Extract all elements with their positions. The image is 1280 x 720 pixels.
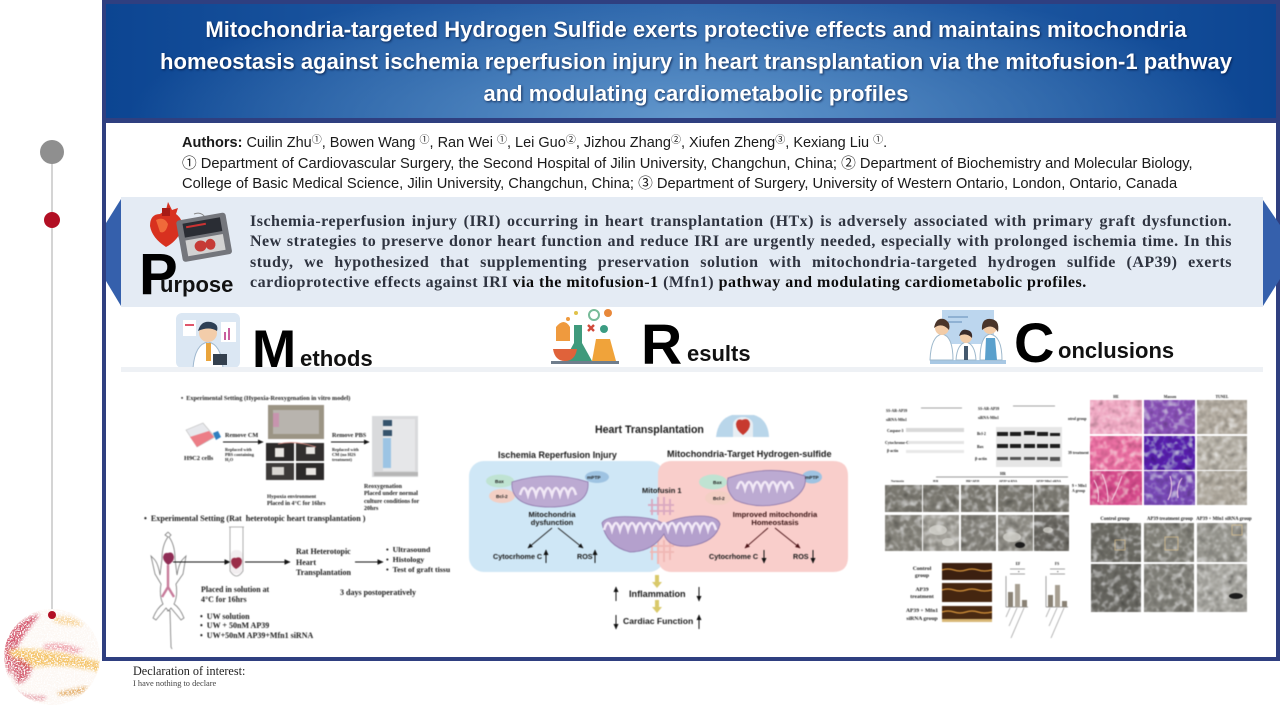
- timeline decoration: [4, 140, 100, 705]
- label: reoxygenation: [364, 484, 420, 512]
- label: ROS up: [577, 550, 595, 563]
- authors and affiliations: ① Department of Cardiovascular Surgery, the Second Hospital of Jilin University, Changchun, China; ② Department of Biochemistry and Molecular Biology,: [182, 156, 1193, 172]
- heading: mitochondria-target hydrogen-sulfide: Mitochondria-Target Hydrogen-sulfide: [667, 449, 832, 459]
- label: hypoxia environment: Hypoxia environment: [267, 494, 316, 500]
- bar chart: EF: [1006, 562, 1028, 638]
- label: reoxygenation: 20hrs: [364, 506, 379, 512]
- western blot: caspase and cytochrome: Cytochrome-C: [885, 441, 909, 445]
- icon: cell culture flask: [186, 423, 221, 447]
- western blot: Bcl-2 and Bax: siRNA-Mfn1: [978, 416, 999, 420]
- label: placed in 4 degrees: Placed in 4°C for 16hrs: [267, 500, 326, 507]
- western blot: caspase and cytochrome: SS-AR-AP39: [886, 409, 907, 413]
- echocardiography strips: [906, 563, 992, 622]
- label: ROS up: ROS: [577, 552, 593, 561]
- arrow: to cardiac function: [652, 600, 662, 613]
- icon: test tube with heart: [229, 527, 244, 576]
- list: outcome tests: [386, 545, 451, 574]
- label: improved mitochondria homeostasis: Homeostasis: [751, 518, 799, 527]
- heading: Purpose: [139, 242, 233, 307]
- section header: Results: [551, 309, 751, 377]
- echocardiography strips: siRNA group: [906, 616, 938, 622]
- histology grid: 9 + Mfn1: [1072, 484, 1087, 488]
- left chevron: [106, 199, 121, 306]
- divider strip: [121, 367, 1263, 372]
- purpose text: [250, 213, 1232, 291]
- heading: Results: esults: [687, 341, 751, 366]
- histology grid: TUNEL: [1215, 395, 1229, 399]
- arrow: to inflammation: [652, 575, 662, 588]
- arrow: remove CM: Replaced with: [225, 447, 252, 452]
- bar chart: EF: *: [1018, 570, 1020, 574]
- electron micrographs: treatment columns: HR: [1000, 472, 1006, 476]
- label: placed in solution: 4°C for 16hrs: [201, 595, 247, 604]
- list: outcome tests: • Test of graft tissu: [386, 565, 451, 574]
- purpose text: New strategies to preserve donor heart function and reduce IRI are urgently needed, especially with prolonged ischemia time. In this: [250, 233, 1232, 250]
- title: homeostasis against ischemia reperfusion injury in heart transplantation via the mitofusion-1 pathway: [160, 49, 1232, 74]
- label: cardiac function: [616, 615, 699, 629]
- histology grid: ntrol group: [1068, 417, 1087, 421]
- arrow: remove PBS: [331, 432, 369, 462]
- list: solution groups: • UW solution: [200, 612, 250, 621]
- list: solution groups: • UW+50nM AP39+Mfn1 siRNA: [200, 631, 313, 640]
- label: rat heterotopic heart transplantation: Heart: [296, 558, 316, 567]
- electron micrographs: control, AP39, siRNA: AP39 treatment group: [1147, 517, 1193, 522]
- western blot: caspase and cytochrome: siRNA-Mfn1: [886, 418, 907, 422]
- heading: heart transplantation: Heart Transplantation: [595, 424, 704, 436]
- declaration text: I have nothing to declare: [133, 679, 216, 688]
- arrow: remove CM: Remove CM: [225, 432, 258, 439]
- arrow: remove PBS: treatment): [332, 457, 352, 462]
- icon: scientists with microscope: [930, 310, 1006, 364]
- section header: Conclusions: [930, 310, 1174, 374]
- electron micrographs: treatment columns: HR+AP39: [966, 479, 980, 483]
- western blot: caspase and cytochrome: Caspase-3: [887, 429, 904, 433]
- label: reoxygenation: culture conditions for: [364, 499, 420, 505]
- title banner: [106, 4, 1276, 123]
- illustration: damaged mitochondrion: mPTP: [587, 475, 601, 481]
- histology grid: 39 treatment: [1068, 451, 1089, 455]
- icon: lab flasks: [551, 309, 619, 364]
- icon: rat heart and vessels: [162, 552, 174, 597]
- electron micrographs: treatment columns: H/R: [933, 479, 939, 483]
- western blot: Bcl-2 and Bax: [975, 406, 1062, 467]
- illustration: healthy mitochondrion: mPTP: [805, 475, 819, 481]
- icon: heart and preservation machine: [150, 202, 232, 262]
- electron micrographs: control, AP39, siRNA: [1091, 517, 1252, 612]
- list: outcome tests: • Histology: [386, 555, 424, 564]
- bar chart: FS: [1046, 562, 1068, 638]
- label: mitochondria dysfunction: dysfunction: [531, 518, 574, 527]
- panel: ischemia reperfusion injury: [469, 461, 664, 572]
- electron micrographs: control, AP39, siRNA: Control group: [1100, 517, 1130, 522]
- illustration: rat: [151, 532, 186, 649]
- bar chart: FS: FS: [1055, 562, 1059, 566]
- heading: Purpose: urpose: [160, 272, 233, 297]
- authors and affiliations: [182, 134, 1193, 192]
- heading: Conclusions: onclusions: [1058, 338, 1174, 363]
- section header: Methods: [176, 313, 373, 370]
- label: mitofusin 1: Mitofusin 1: [642, 486, 682, 495]
- conclusions figure: [885, 395, 1252, 638]
- western blot: Bcl-2 and Bax: SS-AR-AP39: [978, 407, 999, 411]
- label: placed in solution: Placed in solution at: [201, 585, 270, 594]
- purpose panel: [106, 197, 1280, 307]
- western blot: caspase and cytochrome: [885, 408, 964, 453]
- label: reoxygenation: Reoxygenation: [364, 484, 403, 490]
- western blot: Bcl-2 and Bax: β-actin: [975, 456, 988, 461]
- illustration: healthy mitochondrion: Bax: [713, 480, 722, 486]
- heading: Conclusions: [1014, 311, 1174, 374]
- label: ROS down: [793, 550, 813, 563]
- label: mitochondria dysfunction: Mitochondria: [528, 510, 576, 519]
- list: outcome tests: • Ultrasound: [386, 545, 431, 554]
- label: inflammation: [616, 587, 699, 601]
- photo: hypoxia chambers: [266, 442, 324, 480]
- label: 3 days postoperatively: 3 days postoperatively: [340, 588, 416, 597]
- declaration of interest: [133, 664, 245, 688]
- arrows: dysfunction outcomes: [528, 528, 583, 548]
- authors and affiliations: College of Basic Medical Science, Jilin University, Changchun, China; ③ Department of Surgery, University of Western Ontario, London, Ontario, Canada: [182, 176, 1177, 192]
- illustration: healthy mitochondrion: Bcl-2: [713, 496, 725, 502]
- label: rat heterotopic heart transplantation: Rat Heterotopic: [296, 547, 351, 556]
- arrow: remove CM: [223, 432, 263, 462]
- illustration: fused mitochondria: [602, 497, 720, 564]
- icon: incubator: [372, 416, 418, 477]
- arrows: homeostasis outcomes: [745, 528, 800, 548]
- histology grid: A group: [1072, 489, 1085, 493]
- purpose text: cardioprotective effects against IRI via the mitofusion-1 (Mfn1) pathway and modulating cardiometabolic profiles.: [250, 274, 1087, 291]
- label: cytochrome C up: [493, 550, 546, 563]
- western blot: Bcl-2 and Bax: Bcl-2: [977, 431, 986, 436]
- bar chart: FS: *: [1057, 570, 1059, 574]
- electron micrographs: treatment columns: Normoxia: [891, 479, 904, 483]
- label: H9C2 cells: H9C2 cells: [184, 455, 214, 462]
- title: Mitochondria-targeted Hydrogen Sulfide exerts protective effects and maintains mitochondria: [205, 17, 1187, 42]
- heading: rat transplantation setting: • Experimental Setting (Rat heterotopic heart transplantation ): [144, 514, 366, 523]
- authors and affiliations: Authors: Cuilin Zhu①, Bowen Wang ①, Ran Wei ①, Lei Guo②, Jizhou Zhang②, Xiufen Zheng③, Kexiang Liu ①.: [182, 135, 887, 151]
- arrow: to outcome tests: [355, 561, 383, 563]
- panel background: [121, 197, 1263, 307]
- arrow: remove CM: PBS containing: [225, 452, 255, 457]
- echocardiography strips: treatment: [910, 594, 934, 600]
- label: cytochrome C down: Cytocrhome C: [709, 552, 758, 561]
- purpose text: study, we hypothesized that supplementing preservation solution with mitochondria-targeted hydrogen sulfide (AP39) exerts: [250, 254, 1232, 271]
- arrow: remove CM: H₂O: [225, 457, 234, 462]
- label: reoxygenation: Placed under normal: [364, 491, 418, 497]
- bar chart: EF: EF: [1016, 562, 1021, 566]
- methods figure: [144, 395, 451, 649]
- illustration: damaged mitochondrion: Bcl-2: [496, 494, 508, 500]
- icon: doctor with charts: [176, 313, 240, 367]
- label: ROS down: ROS: [793, 552, 809, 561]
- arrow: tube to transplantation: [245, 561, 290, 563]
- echocardiography strips: AP39 + Mfn1: [906, 608, 938, 614]
- heading: Conclusions: C: [1014, 311, 1054, 374]
- purpose text: Ischemia-reperfusion injury (IRI) occurring in heart transplantation (HTx) is adversely associated with primary graft dysfunction.: [250, 213, 1232, 230]
- label: inflammation: Inflammation: [629, 589, 686, 599]
- label: cytochrome C down: [709, 550, 764, 563]
- histology grid: Masson: [1164, 395, 1177, 399]
- illustration: damaged mitochondrion: [486, 471, 609, 507]
- heading: hypoxia-reoxygenation setting: • Experimental Setting (Hypoxia-Reoxygenation in vitro model): [181, 395, 350, 402]
- results figure: [469, 415, 848, 629]
- icon: chest with heart: [716, 415, 769, 437]
- illustration: damaged mitochondrion: Bax: [495, 479, 504, 485]
- heading: Results: R: [641, 313, 682, 377]
- label: mitochondria dysfunction: [528, 510, 576, 527]
- electron micrographs: control, AP39, siRNA: AP39 + Mfn1 siRNA group: [1196, 517, 1252, 522]
- photo: hypoxia bag: [268, 405, 324, 439]
- electron micrographs: treatment columns: AP39+Mfn1 siRNA: [1036, 479, 1062, 483]
- label: cytochrome C up: Cytocrhome C: [493, 552, 542, 561]
- western blot: Bcl-2 and Bax: Bax: [977, 444, 984, 449]
- arrow: remove PBS: CM (no H2S: [332, 452, 356, 457]
- label: cardiac function: Cardiac Function: [623, 616, 693, 626]
- panel: hydrogen sulfide: [658, 461, 848, 572]
- title: and modulating cardiometabolic profiles: [483, 81, 909, 106]
- electron micrographs: treatment columns: AP39+si-RNA: [999, 479, 1018, 483]
- histology grid: [1068, 395, 1247, 505]
- heading: Results: [641, 313, 751, 377]
- histology grid: HE: [1113, 395, 1119, 399]
- western blot: caspase and cytochrome: β-actin: [887, 449, 899, 453]
- echocardiography strips: Control: [913, 566, 932, 572]
- electron micrographs: treatment columns: [885, 472, 1069, 551]
- label: rat heterotopic heart transplantation: [296, 547, 352, 577]
- heading: Purpose: P: [139, 242, 178, 307]
- illustration: healthy mitochondrion: [699, 470, 822, 506]
- list: solution groups: [200, 612, 313, 640]
- label: rat heterotopic heart transplantation: Transplantation: [296, 568, 352, 577]
- arrow: rat to tube: [173, 561, 230, 563]
- declaration heading: Declaration of interest:: [133, 664, 245, 678]
- title: [160, 17, 1234, 108]
- label: placed in solution: [201, 585, 270, 604]
- label: improved mitochondria homeostasis: [733, 510, 818, 527]
- echocardiography strips: AP39: [915, 587, 929, 593]
- arrow: remove PBS: Remove PBS: [332, 432, 367, 439]
- heading: Methods: [252, 320, 373, 370]
- label: improved mitochondria homeostasis: Improved mitochondria: [733, 510, 818, 519]
- right chevron: [1263, 200, 1280, 306]
- heading: ischemia reperfusion injury: Ischemia Reperfusion Injury: [498, 450, 617, 460]
- list: solution groups: • UW + 50nM AP39: [200, 621, 269, 630]
- echocardiography strips: group: [915, 573, 929, 579]
- arrow: remove PBS: Replaced with: [332, 447, 359, 452]
